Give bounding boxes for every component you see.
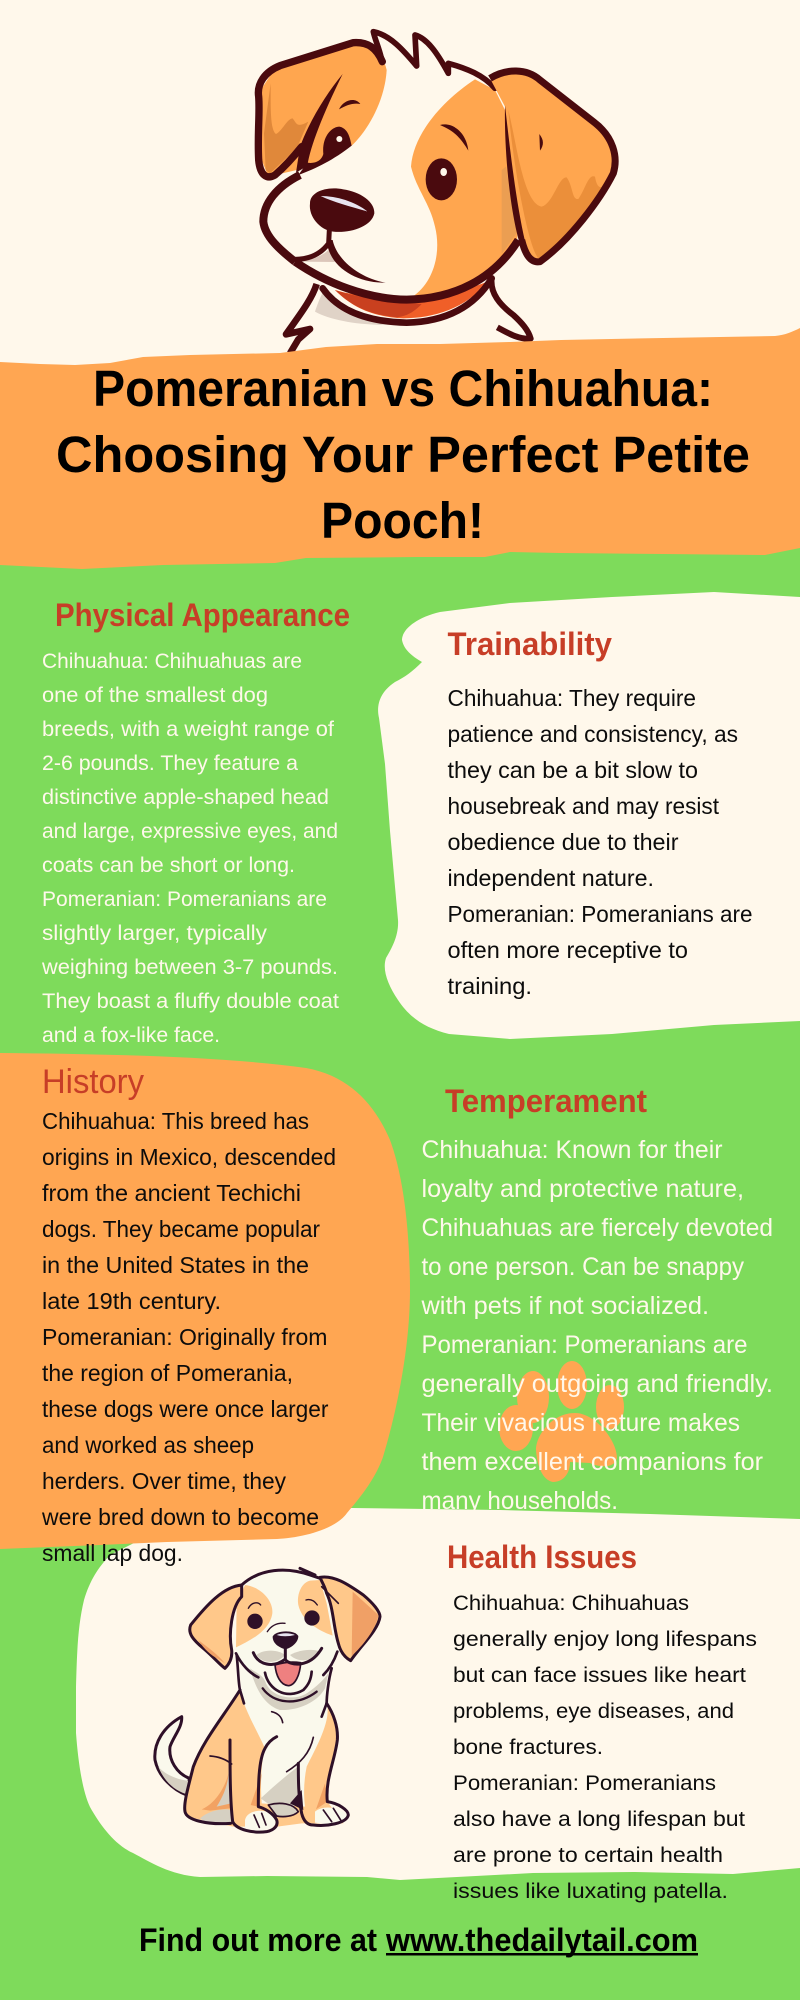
text: health issues: are prone to certain health	[453, 1843, 723, 1867]
text: health issues	[447, 1539, 757, 1903]
text: history: small lap dog.	[42, 1540, 183, 1566]
text: history: late 19th century.	[42, 1288, 221, 1314]
text: history: were bred down to become	[41, 1504, 319, 1530]
text: physical appearance: coats can be short or long.	[42, 854, 295, 877]
text: temperament: loyalty and protective nature,	[422, 1175, 744, 1203]
text: physical appearance: weighing between 3-7 pounds.	[41, 956, 338, 979]
text: history	[41, 1063, 336, 1566]
text: temperament: to one person. Can be snappy	[422, 1253, 744, 1281]
text: history: History	[42, 1063, 144, 1101]
text: history: these dogs were once larger	[42, 1396, 329, 1422]
nose	[310, 188, 374, 232]
text: physical appearance: and large, expressive eyes, and	[42, 820, 338, 843]
text: physical appearance: and a fox-like face.	[42, 1024, 220, 1047]
text: history: in the United States in the	[42, 1252, 309, 1278]
text: history: herders. Over time, they	[42, 1468, 286, 1494]
text: health issues: Chihuahua: Chihuahuas	[453, 1591, 689, 1615]
title	[56, 360, 750, 549]
text: health issues: but can face issues like heart	[453, 1663, 746, 1687]
text: health issues: Health Issues	[447, 1539, 637, 1575]
text: health issues: Pomeranian: Pomeranians	[453, 1771, 716, 1795]
text: temperament: generally outgoing and friendly.	[422, 1370, 773, 1398]
text: temperament	[420, 1083, 773, 1515]
title: Pooch!	[321, 492, 484, 549]
neck lines	[286, 284, 317, 353]
title: Pomeranian vs Chihuahua:	[93, 360, 713, 417]
title: Choosing Your Perfect Petite	[56, 426, 750, 483]
illustration: dog head	[258, 32, 615, 353]
right eye	[426, 158, 457, 200]
text: physical appearance: breeds, with a weight range of	[42, 718, 334, 741]
text: history: dogs. They became popular	[42, 1216, 320, 1242]
text: trainability: independent nature.	[448, 865, 654, 891]
text: trainability: patience and consistency, as	[448, 721, 738, 747]
text: temperament: Their vivacious nature makes	[422, 1409, 740, 1437]
text: physical appearance: distinctive apple-shaped head	[42, 786, 329, 809]
text: physical appearance: They boast a fluffy double coat	[42, 990, 339, 1013]
panel: health issues background	[76, 1508, 800, 1880]
text: temperament: Chihuahuas are fiercely devoted	[422, 1214, 773, 1242]
head outline	[263, 175, 300, 262]
orange title band	[0, 328, 800, 569]
text: health issues: also have a long lifespan but	[453, 1807, 745, 1831]
text: physical appearance: Physical Appearance	[55, 597, 350, 633]
text: health issues: generally enjoy long lifespans	[453, 1627, 757, 1651]
text: health issues: issues like luxating patella.	[453, 1879, 728, 1903]
muzzle shade and mouth	[298, 250, 335, 262]
text: physical appearance: Pomeranian: Pomeranians are	[42, 888, 327, 911]
illustration: sitting puppy	[155, 1568, 380, 1832]
panel: trainability background	[378, 592, 800, 1039]
text: trainability: they can be a bit slow to	[448, 757, 698, 783]
text: trainability: often more receptive to	[448, 937, 688, 963]
text: trainability: Trainability	[448, 626, 612, 662]
left eye	[298, 127, 352, 175]
text: history: from the ancient Techichi	[42, 1180, 301, 1206]
text: health issues: bone fractures.	[453, 1735, 603, 1759]
text: physical appearance: 2-6 pounds. They feature a	[42, 752, 298, 775]
text: health issues: problems, eye diseases, and	[453, 1699, 734, 1723]
text: physical appearance: one of the smallest dog	[42, 684, 268, 707]
text: history: Pomeranian: Originally from	[42, 1324, 328, 1350]
text: trainability: obedience due to their	[448, 829, 679, 855]
footer call to action: Find out more at	[139, 1922, 377, 1958]
text: trainability: housebreak and may resist	[448, 793, 720, 819]
footer call to action: www.thedailytail.com	[385, 1922, 698, 1958]
text: trainability: training.	[448, 973, 532, 999]
footer call to action	[139, 1922, 698, 1958]
text: history: origins in Mexico, descended	[42, 1144, 336, 1170]
text: temperament: Pomeranian: Pomeranians are	[422, 1331, 748, 1359]
jaw line	[295, 240, 518, 300]
panel: history background	[0, 1053, 410, 1549]
icon: paw print	[499, 1361, 624, 1482]
text: trainability: Pomeranian: Pomeranians are	[448, 901, 752, 927]
text: history: the region of Pomerania,	[42, 1360, 293, 1386]
text: temperament: Chihuahua: Known for their	[422, 1136, 722, 1164]
header cream background	[0, 0, 800, 420]
text: trainability: Chihuahua: They require	[448, 685, 696, 711]
text: history: Chihuahua: This breed has	[42, 1108, 309, 1134]
right ear	[490, 71, 615, 262]
text: physical appearance: Chihuahua: Chihuahuas are	[42, 650, 302, 673]
text: temperament: them excellent companions for	[422, 1448, 763, 1476]
text: physical appearance: slightly larger, typically	[42, 922, 268, 945]
text: physical appearance	[41, 597, 350, 1047]
text: temperament: Temperament	[445, 1083, 647, 1119]
text: temperament: with pets if not socialized.	[420, 1292, 709, 1320]
text: trainability	[448, 626, 752, 999]
collar	[315, 289, 387, 325]
text: history: and worked as sheep	[42, 1432, 254, 1458]
puppy head	[235, 1570, 337, 1682]
text: temperament: many households.	[422, 1487, 618, 1515]
